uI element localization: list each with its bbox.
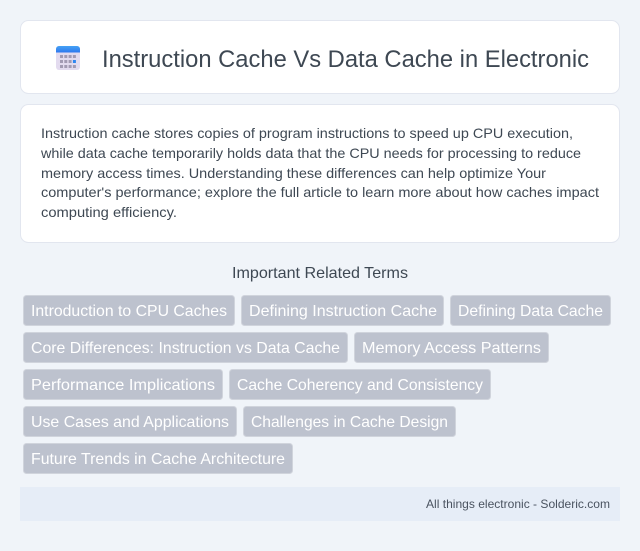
- footer credit: All things electronic - Solderic.com: [426, 497, 610, 511]
- tag: Performance Implications: [24, 370, 222, 400]
- tag: Use Cases and Applications: [24, 406, 236, 436]
- intro paragraph: computer's performance; explore the full article to learn more about how caches impact: [41, 184, 599, 200]
- footer bar: [20, 487, 620, 521]
- tag list: [24, 296, 610, 474]
- panel: introduction text: [20, 104, 620, 242]
- tag: Core Differences: [24, 332, 348, 362]
- tag: Memory Access Patterns: [354, 332, 548, 362]
- tag: Defining Data Cache: [450, 296, 610, 326]
- intro paragraph: computing efficiency.: [41, 204, 177, 220]
- header panel: [20, 20, 620, 94]
- intro paragraph: while data cache temporarily holds data that the CPU needs for processing to reduce: [40, 145, 581, 161]
- tag: Core Differences: Core Differences: Instruction vs Data Cache: [31, 340, 340, 357]
- tag: Defining Data Cache: Defining Data Cache: [458, 303, 603, 320]
- tag: Use Cases and Applications: Use Cases and Applications: [31, 414, 229, 431]
- tag: Challenges in Cache Design: [244, 406, 456, 436]
- tag: Introduction to CPU Caches: [24, 296, 234, 326]
- intro paragraph: [40, 125, 599, 220]
- tag: Cache Coherency and Consistency: Cache Coherency and Consistency: [237, 377, 483, 394]
- title: Instruction Cache Vs Data Cache in Electronic: [102, 46, 589, 73]
- tag: Challenges in Cache Design: Challenges in Cache Design: [251, 414, 448, 431]
- intro paragraph: Instruction cache stores copies of program instructions to speed up CPU execution,: [41, 125, 573, 141]
- tag: Defining Instruction Cache: Defining Instruction Cache: [249, 303, 437, 320]
- tag: Future Trends in Cache Architecture: [24, 444, 292, 474]
- tag: Performance Implications: Performance Implications: [31, 377, 215, 394]
- icon: calendar grid: [56, 46, 80, 70]
- tag: Future Trends in Cache Architecture: Future Trends in Cache Architecture: [31, 451, 285, 468]
- intro paragraph: memory access times. Understanding these differences can help optimize Your: [41, 165, 546, 181]
- tag: Cache Coherency and Consistency: [230, 370, 490, 400]
- tag: Defining Instruction Cache: [242, 296, 444, 326]
- tag: Introduction to CPU Caches: Introduction to CPU Caches: [31, 303, 227, 320]
- tag: Memory Access Patterns: Memory Access Patterns: [362, 340, 541, 357]
- heading: important related terms: Important Related Terms: [232, 265, 408, 282]
